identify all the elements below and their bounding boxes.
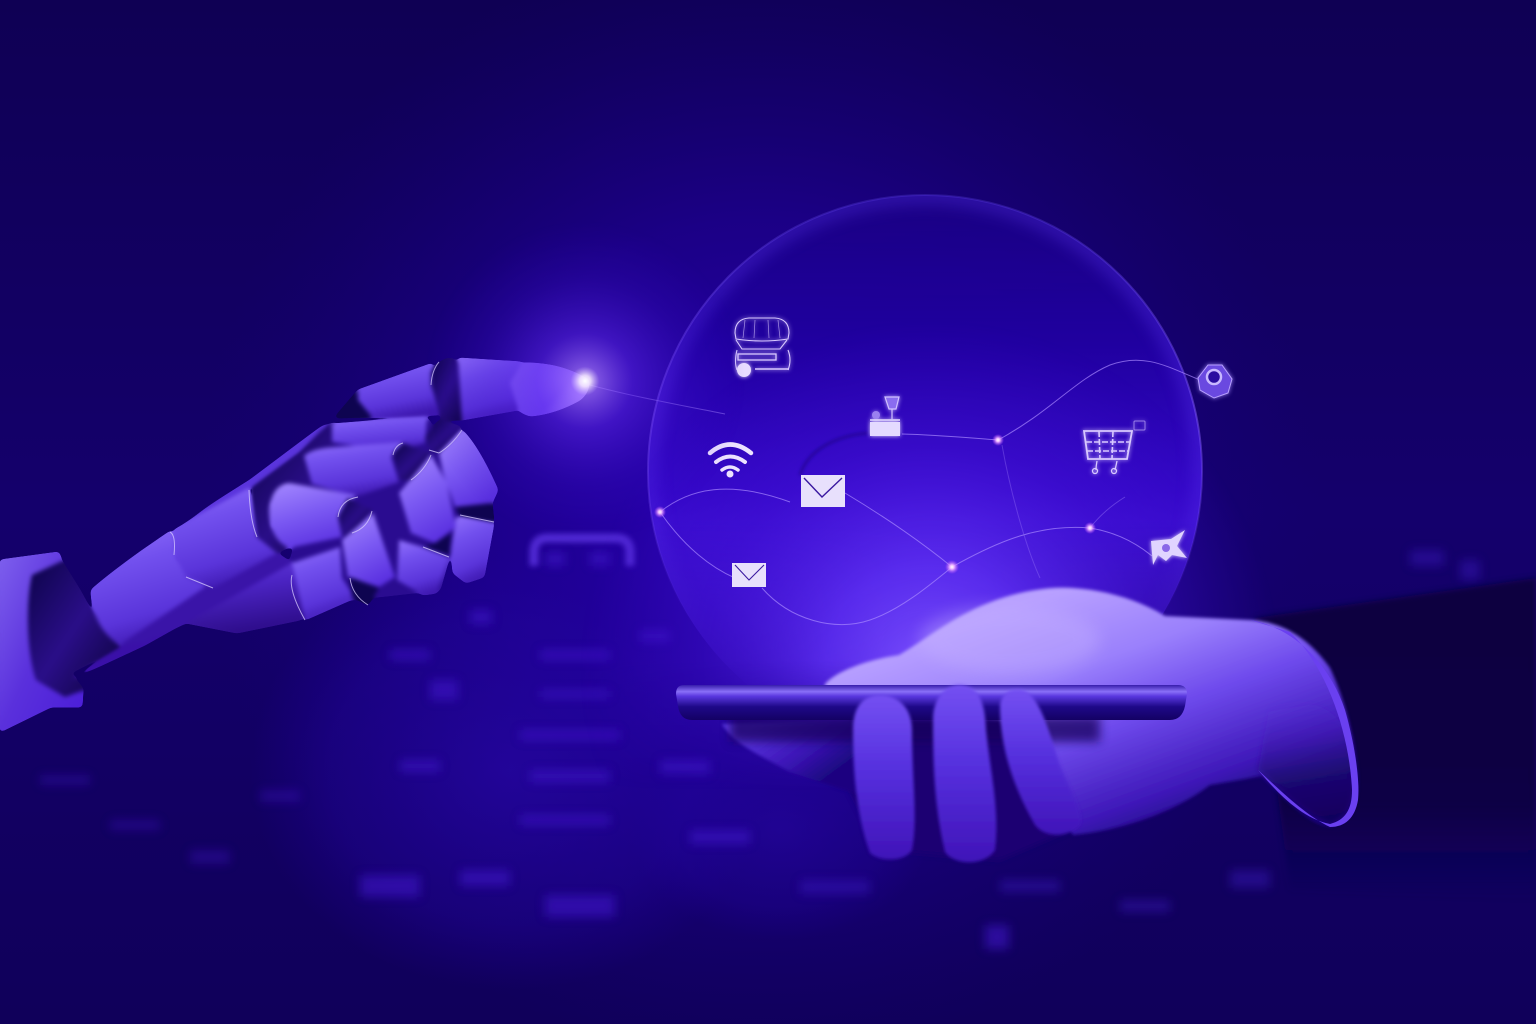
hand core behind fingers xyxy=(290,420,460,600)
icon: bakery display xyxy=(735,318,790,377)
thumb base xyxy=(186,547,350,633)
index finger proximal xyxy=(358,363,439,417)
thumb phalanx xyxy=(292,547,355,620)
icon: paper plane star xyxy=(1151,530,1187,565)
index finger xyxy=(853,695,915,859)
wrist segment xyxy=(91,530,205,645)
smartphone xyxy=(676,685,1187,720)
wrist joint dark xyxy=(28,561,119,697)
curled index finger xyxy=(425,420,462,453)
shadow under the phone xyxy=(730,716,1100,742)
sleeve cuff xyxy=(0,552,83,732)
icon: plant on box xyxy=(870,397,900,436)
glowing network nodes xyxy=(654,434,1096,574)
icon: large envelope xyxy=(801,475,845,507)
forearm shadow sliver xyxy=(70,622,186,680)
ring finger xyxy=(1000,690,1081,835)
knuckle plate xyxy=(174,488,277,588)
index finger middle phalanx xyxy=(458,358,522,420)
base of the hand below phone xyxy=(722,720,860,795)
human hand xyxy=(722,588,1358,860)
blurred city skyline xyxy=(40,538,1480,990)
human fingers xyxy=(853,685,1081,862)
robot hand xyxy=(0,358,589,732)
curled middle finger xyxy=(393,443,431,480)
middle finger proximal xyxy=(332,417,427,452)
pinky proximal xyxy=(269,483,356,548)
icon: small envelope xyxy=(732,563,766,587)
index fingertip xyxy=(510,363,589,416)
icon: ring gadget xyxy=(1198,365,1232,398)
holographic sphere xyxy=(628,194,1250,768)
palm and back of the hand xyxy=(825,588,1358,835)
shirt cuff edge xyxy=(1250,620,1358,827)
network connection lines xyxy=(590,360,1200,625)
back plate sliver xyxy=(180,420,332,524)
middle finger xyxy=(933,685,996,862)
dark knuckle gap xyxy=(253,422,360,553)
icon: shopping cart xyxy=(1084,421,1145,474)
icon: wifi xyxy=(710,444,751,478)
fingertip glow xyxy=(425,221,745,541)
metallic joint highlights xyxy=(170,362,494,620)
dark arc behind plant icon xyxy=(800,433,868,475)
underside between knuckles and thumb xyxy=(119,553,292,645)
dark interior behind fingers xyxy=(850,720,1070,860)
index finger joint xyxy=(431,358,466,420)
dark suit sleeve xyxy=(1255,578,1536,900)
inner cuff shadow xyxy=(1258,700,1355,824)
curled pinky xyxy=(338,498,372,537)
ring finger proximal xyxy=(304,442,403,497)
highlight on the back of the hand xyxy=(920,606,1100,674)
